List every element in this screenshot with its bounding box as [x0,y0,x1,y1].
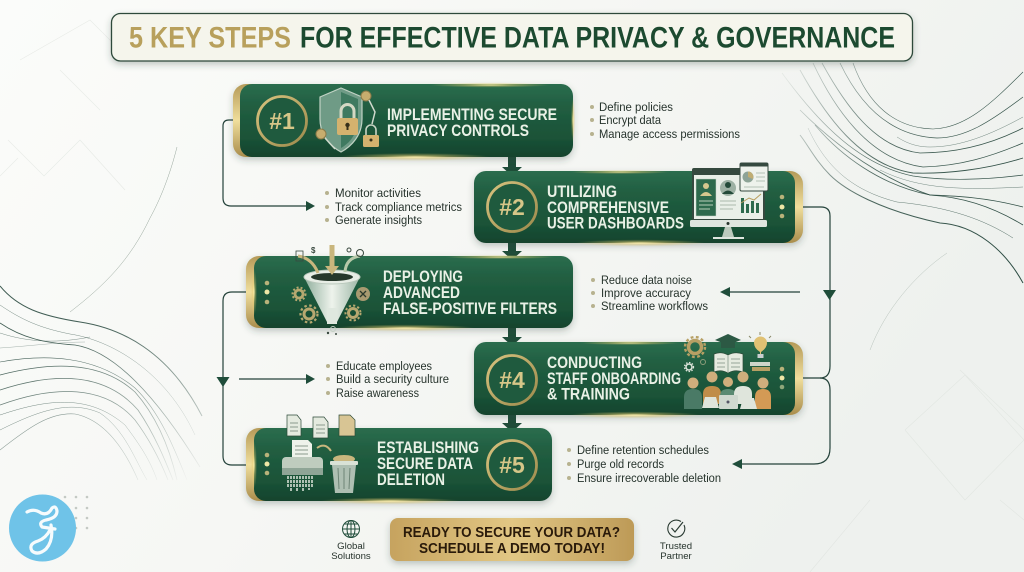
panel: step 3 [246,245,573,335]
logo dots [64,496,88,529]
step 5 number badge: #5 [499,452,525,478]
step 1 heading [387,106,557,140]
step 2 number badge: #2 [499,194,525,220]
badge: trusted partner: Trusted [660,541,692,552]
bullets: step 5: Purge old records [577,457,664,471]
bullets: step 5: Ensure irrecoverable deletion [577,471,721,485]
panel: step 5 [246,415,552,504]
panel: step 2 [474,163,803,246]
step 1 heading: IMPLEMENTING SECURE [387,106,557,124]
bullets: step 3 [591,273,708,313]
step 3 side dots [264,281,270,304]
step 1 heading: PRIVACY CONTROLS [387,122,529,140]
bullets: step 1 [590,100,740,141]
bullets: step 2: Monitor activities [335,186,421,200]
call to action button: READY TO SECURE YOUR DATA? [403,525,620,541]
step 4 heading [547,354,681,404]
step 2 number badge [488,182,536,232]
flow arrow 1 to 2 [502,155,522,176]
step 5 number badge [488,440,536,490]
panel: step 4 [474,332,803,418]
bullets: step 1: Define policies [599,100,673,114]
bullets: step 4: Raise awareness [336,386,419,400]
bullets: step 4: Build a security culture [336,372,449,386]
decorative thin arc right [870,253,947,350]
step 3 heading: FALSE-POSITIVE FILTERS [383,300,557,318]
panel: step 1 [233,82,575,161]
title main: FOR EFFECTIVE DATA PRIVACY & GOVERNANCE [300,22,895,54]
step 2 heading [547,183,684,232]
title highlight: 5 KEY STEPS [129,22,291,54]
connector: step 3 to step 5 loop [216,292,246,465]
decorative wave lines right [782,63,1023,283]
step 2 side dots [780,195,784,218]
step 5 heading: ESTABLISHING [377,439,479,457]
connector: step 1 to bullets [223,120,315,211]
decorative wave lines left [0,286,202,480]
step 4 side dots [780,367,784,389]
bullets: step 5 [567,443,721,485]
bullets: step 1: Encrypt data [599,113,661,127]
badge: trusted partner [660,520,693,562]
bullets: step 1: Manage access permissions [599,127,740,141]
bullets: step 2: Generate insights [335,213,422,227]
call to action button: SCHEDULE A DEMO TODAY! [419,541,605,557]
arrow to step 4 bullets [239,374,315,384]
icon: funnel with gears: $ [311,246,316,255]
icon: shield with locks and keys [316,88,379,152]
flow arrow 4 to 5 [502,413,522,432]
step 4 heading: STAFF ONBOARDING [547,370,681,388]
icon: dashboard monitor [690,163,768,239]
bullets: step 2 [325,186,462,227]
step 4 heading: CONDUCTING [547,354,642,372]
call to action button [390,518,634,561]
step 1 number badge [258,96,306,146]
step 5 heading: DELETION [377,471,445,489]
connector: step 2 to step 4 loop [732,207,836,469]
step 1 number badge: #1 [269,108,295,134]
step 3 heading [383,268,557,318]
flow arrow 2 to 3 [502,241,522,260]
icon: shredder, documents and bin [282,415,358,493]
step 3 heading: ADVANCED [383,284,460,302]
step 5 side dots [264,453,270,475]
title banner [112,14,912,61]
bullets: step 4: Educate employees [336,359,432,373]
flow arrow 3 to 4 [502,326,522,346]
step 3 heading: DEPLOYING [383,268,463,286]
bullets: step 3: Improve accuracy [601,286,692,300]
bullets: step 2: Track compliance metrics [335,200,462,214]
badge: trusted partner: Partner [660,551,693,562]
logo: blue circle with script mark [9,494,76,562]
icon: funnel with gears [292,245,370,335]
connector: arrow to step 3 bullets [720,287,800,297]
step 4 heading: & TRAINING [547,386,630,404]
bullets: step 5: Define retention schedules [577,443,709,457]
icon: team training [684,332,771,409]
step 4 number badge [488,356,536,404]
decorative thin arc left [70,147,177,312]
step 2 heading: UTILIZING [547,183,617,201]
badge: global solutions: Global [337,541,365,552]
step 5 heading [377,439,479,489]
step 5 heading: SECURE DATA [377,455,473,473]
step 2 heading: USER DASHBOARDS [547,214,684,232]
step 2 heading: COMPREHENSIVE [547,199,669,217]
bullets: step 3: Reduce data noise [601,273,692,287]
step 4 number badge: #4 [499,367,525,393]
bullets: step 3: Streamline workflows [601,299,708,313]
badge: global solutions [331,520,371,562]
badge: global solutions: Solutions [331,551,371,562]
bullets: step 4 [326,359,449,400]
